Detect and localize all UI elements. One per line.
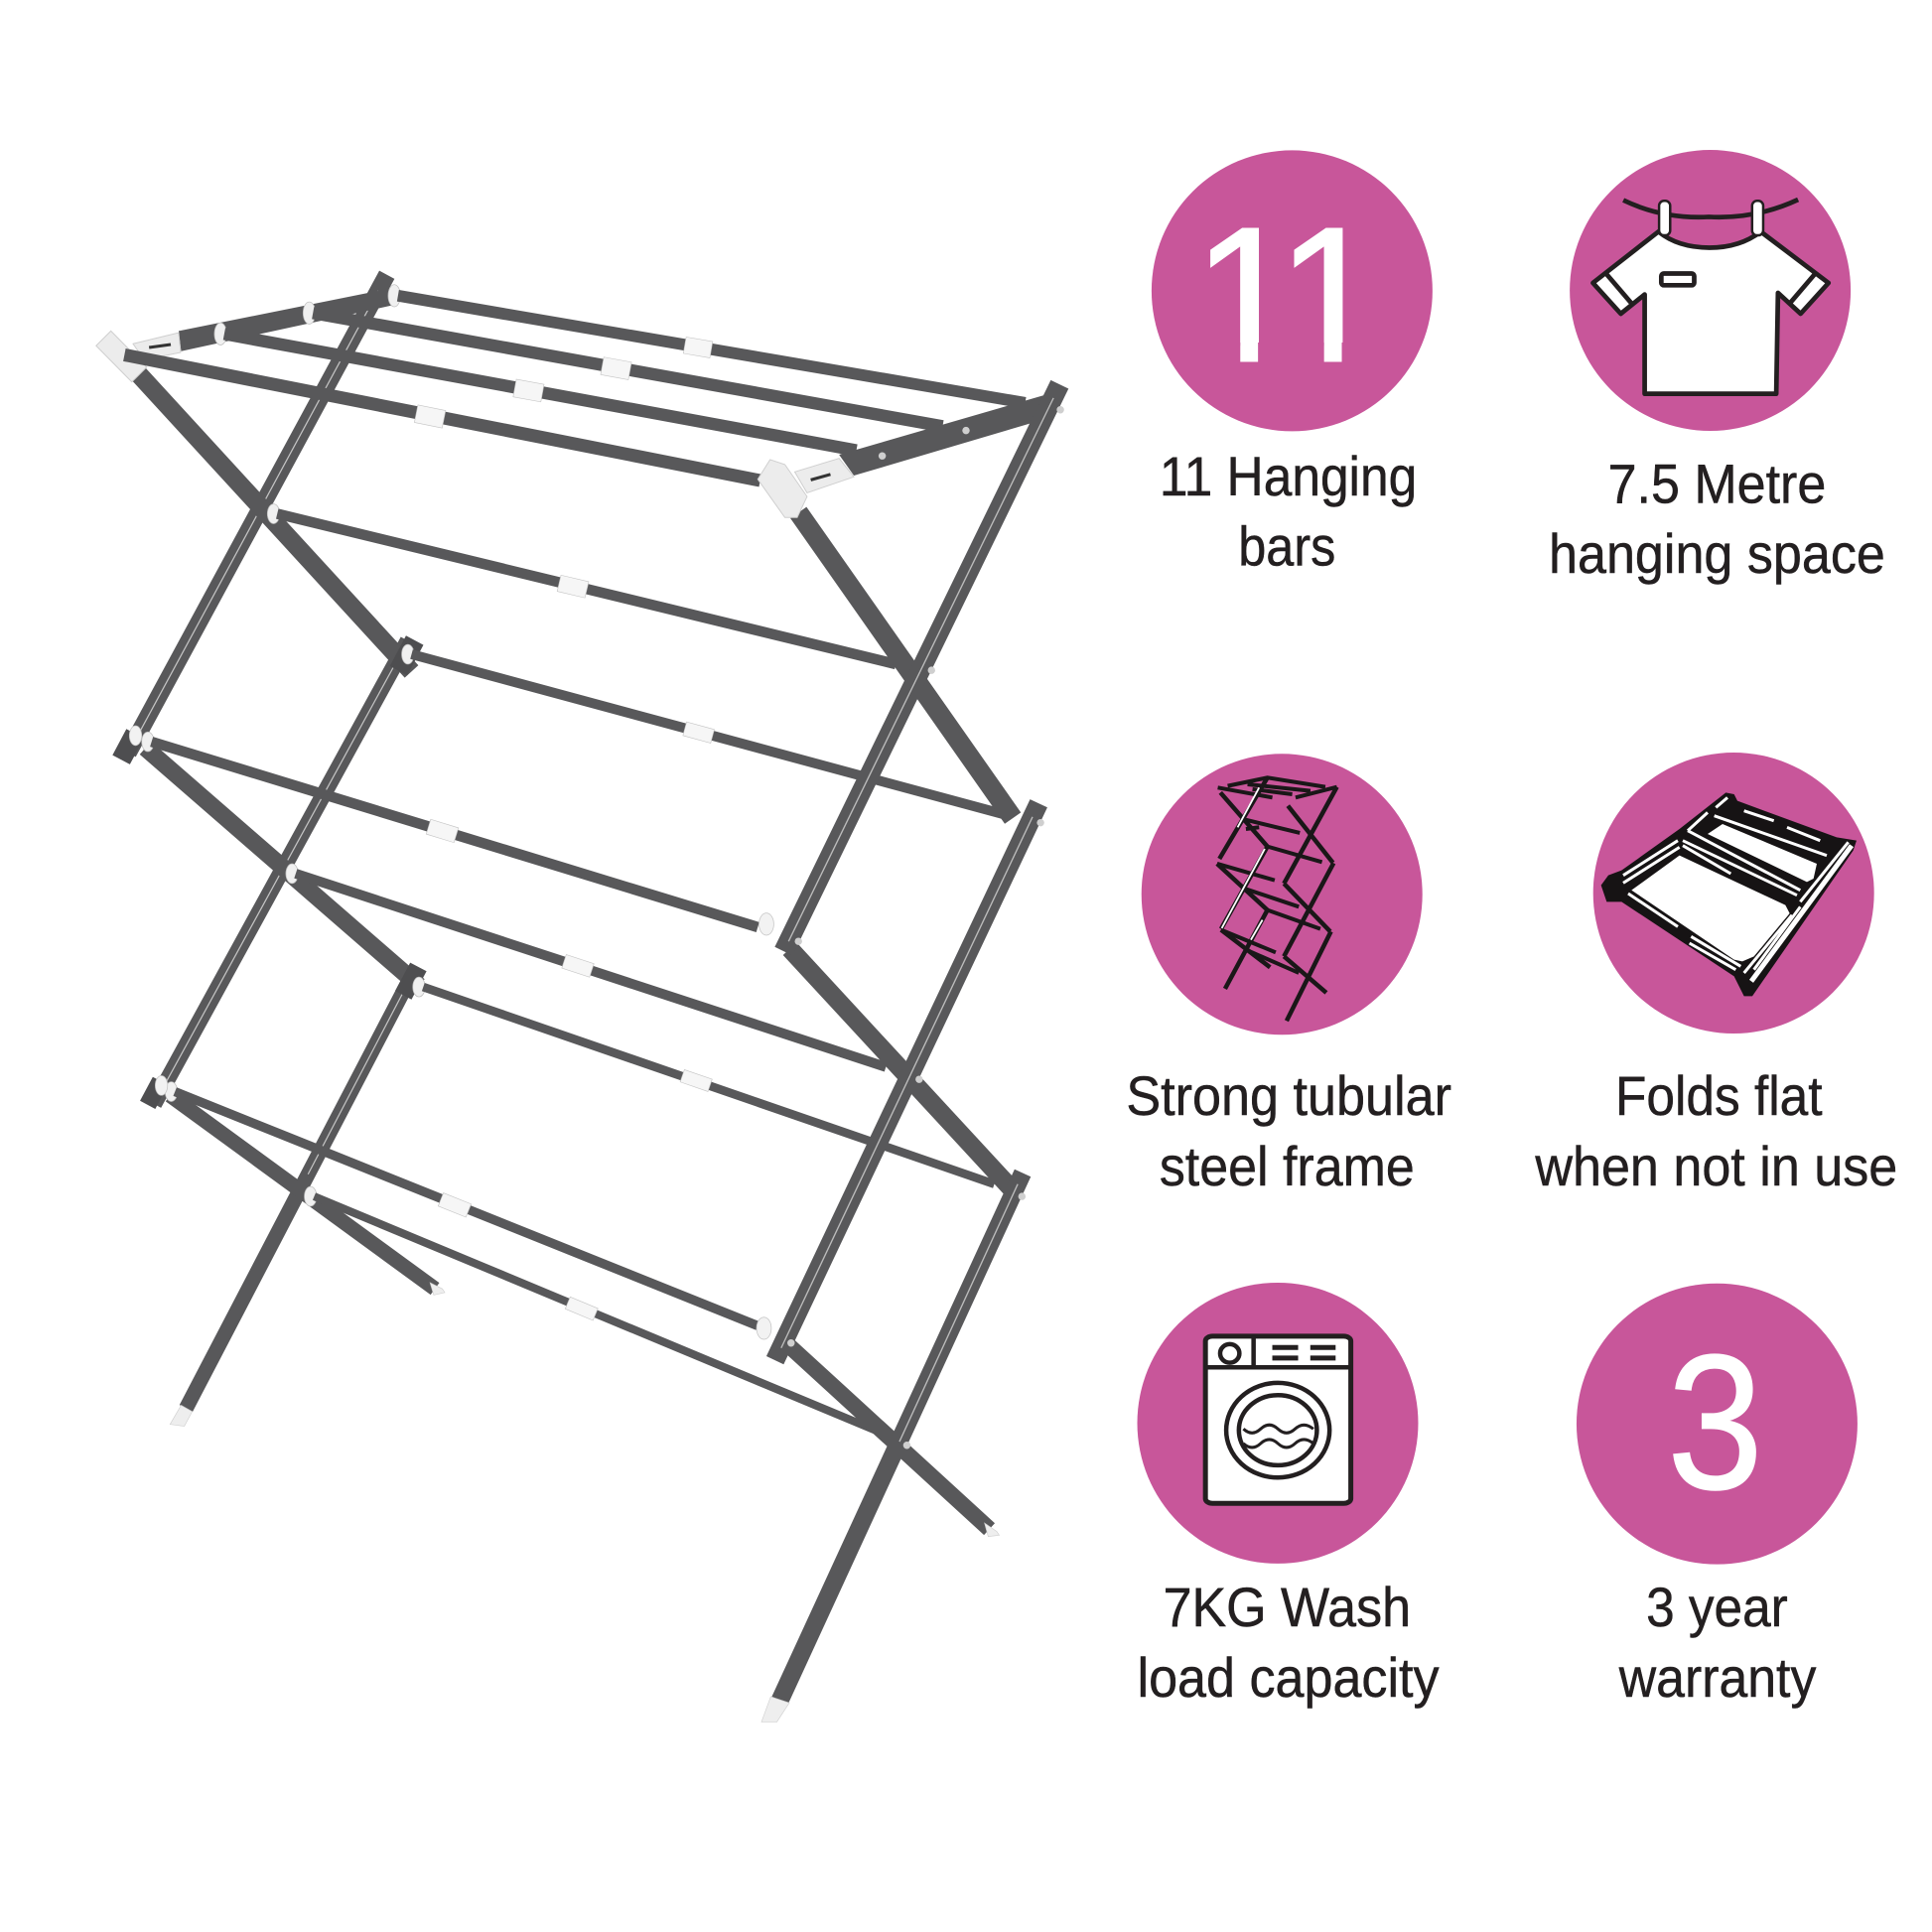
caption: 11 Hanging xyxy=(1160,445,1417,507)
caption: steel frame xyxy=(1160,1135,1415,1197)
panel: 11 hanging bars xyxy=(1152,150,1433,578)
badge circle xyxy=(1593,753,1874,1034)
top end frame: right xyxy=(839,394,1047,476)
airer left cross struts xyxy=(138,373,435,1289)
caption: warranty xyxy=(1618,1646,1816,1709)
caption: 3 year xyxy=(1646,1576,1788,1638)
badge circle xyxy=(1152,150,1433,431)
rivets xyxy=(787,406,1064,1449)
rod collars: top rods xyxy=(214,285,400,345)
icon: airer frame xyxy=(1217,777,1337,1021)
product: folding clothes airer xyxy=(96,275,1064,1722)
panel: folds flat xyxy=(1534,753,1897,1197)
caption: hanging space xyxy=(1549,522,1885,585)
plastic corner bracket: right xyxy=(758,459,854,517)
airer right cross struts xyxy=(786,512,1013,1529)
joint blocks xyxy=(112,635,427,1109)
front legs xyxy=(775,384,1059,1701)
panel: strong tubular steel frame xyxy=(1126,754,1451,1197)
top end frame: left xyxy=(179,287,397,351)
rod collars: lower rods xyxy=(142,504,425,1206)
badge circle xyxy=(1577,1284,1858,1565)
badge circle xyxy=(1138,1283,1418,1564)
lower hanging rods xyxy=(152,514,1004,1431)
icon: washing machine xyxy=(1205,1336,1351,1503)
panel: 3 year warranty xyxy=(1577,1284,1858,1709)
rod clip shadows xyxy=(416,345,713,1314)
caption: when not in use xyxy=(1534,1135,1897,1197)
icon: t-shirt on washing line xyxy=(1592,200,1829,394)
panel: 7.5 metre hanging space xyxy=(1549,150,1885,585)
badge circle xyxy=(1142,754,1423,1035)
top hanging rods xyxy=(124,296,1026,481)
foot tips xyxy=(170,1283,1000,1722)
caption: Strong tubular xyxy=(1126,1064,1451,1127)
small plastic joints xyxy=(129,726,773,1339)
front leg highlights xyxy=(781,398,1053,1442)
rod connector clips xyxy=(416,345,712,1314)
airer back legs xyxy=(128,275,414,1409)
big number 11: 11 xyxy=(1192,189,1383,403)
caption: 7.5 Metre xyxy=(1608,452,1826,514)
icon: folded airer xyxy=(1601,792,1857,996)
caption: Folds flat xyxy=(1615,1064,1823,1127)
big number 3: 3 xyxy=(1667,1315,1763,1530)
badge circle xyxy=(1570,150,1851,431)
caption: load capacity xyxy=(1138,1646,1440,1709)
plastic corner bracket: left xyxy=(96,331,181,382)
caption: 7KG Wash xyxy=(1164,1576,1411,1638)
panel: 7kg wash load xyxy=(1138,1283,1440,1709)
caption: bars xyxy=(1238,515,1335,578)
airer back leg highlights xyxy=(133,291,407,1174)
